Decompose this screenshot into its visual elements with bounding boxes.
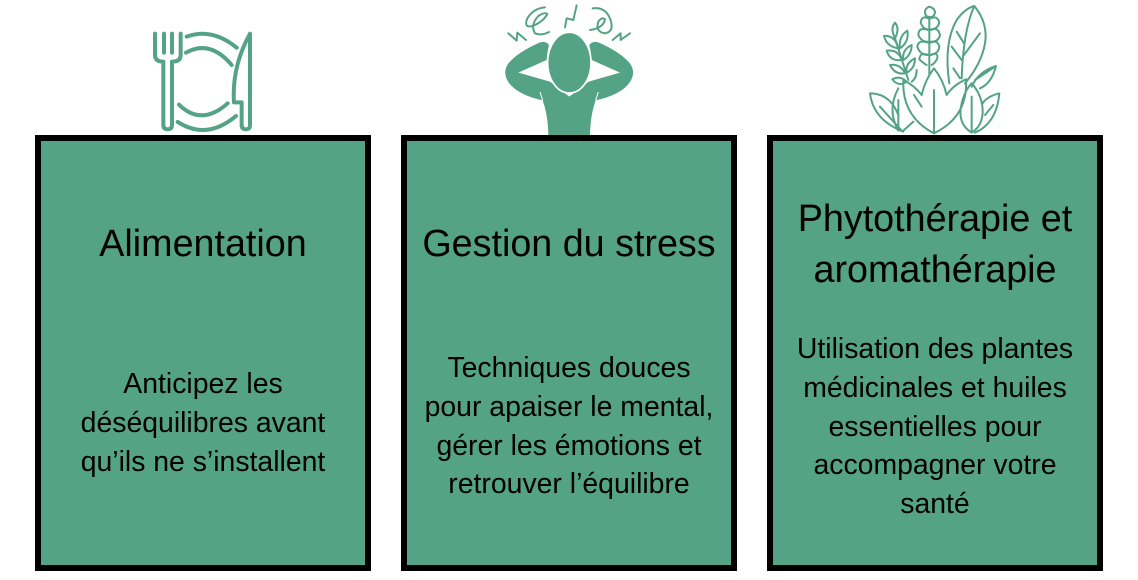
- text: phytotherapy description: santé: [900, 488, 970, 520]
- text: phytotherapy description: [797, 333, 1073, 520]
- text: stress description: Techniques douces: [447, 352, 691, 384]
- text: phytotherapy description: Utilisation des plantes: [797, 333, 1073, 365]
- text: Alimentation description: qu’ils ne s’installent: [81, 446, 325, 478]
- text: phytotherapy description: essentielles pour: [828, 411, 1042, 443]
- heading: Phytothérapie et aromathérapie: [798, 197, 1072, 290]
- panel: Gestion du stress: [401, 135, 737, 571]
- heading: Alimentation: Alimentation: [99, 222, 307, 264]
- text: Alimentation description: [81, 368, 326, 478]
- text: phytotherapy description: accompagner votre: [813, 449, 1057, 481]
- icon: plate with fork and knife: [153, 32, 252, 132]
- heading: Phytothérapie et aromathérapie: Phytothérapie et: [798, 197, 1072, 239]
- text: stress description: gérer les émotions et: [436, 430, 702, 462]
- text: stress description: pour apaiser le mental,: [425, 391, 713, 423]
- heading: Phytothérapie et aromathérapie: aromathérapie: [813, 248, 1057, 290]
- text: phytotherapy description: médicinales et huiles: [803, 372, 1067, 404]
- panel: Phytothérapie et aromathérapie: [767, 135, 1103, 571]
- text: Alimentation description: déséquilibres avant: [81, 407, 325, 439]
- panel: Alimentation: [35, 135, 371, 571]
- text: stress description: retrouver l’équilibre: [448, 468, 690, 500]
- text: stress description: [425, 352, 713, 500]
- text: Alimentation description: Anticipez les: [123, 368, 283, 400]
- heading: Gestion du stress: Gestion du stress: [422, 222, 716, 264]
- icon: stressed person holding head: [505, 4, 634, 135]
- icon: medicinal plants: [869, 5, 1000, 134]
